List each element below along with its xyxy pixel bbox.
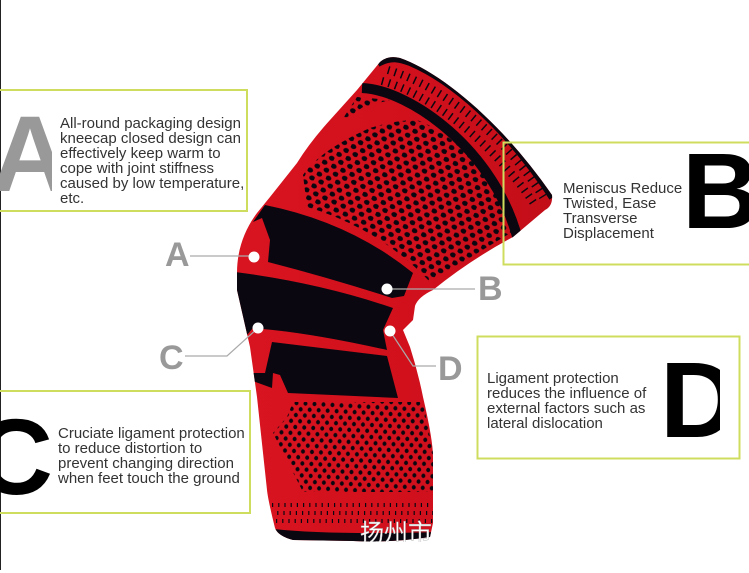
callout B xyxy=(382,270,503,308)
text B: Displacement xyxy=(563,225,655,242)
text A: kneecap closed design can xyxy=(60,130,241,147)
text B xyxy=(563,180,682,242)
black band one xyxy=(253,205,413,298)
bottom rim xyxy=(276,529,431,542)
box A xyxy=(0,90,247,214)
text A: cope with joint stiffness xyxy=(60,160,214,177)
text C: prevent changing direction xyxy=(58,455,234,472)
text D: external factors such as xyxy=(487,400,645,417)
text C: when feet touch the ground xyxy=(57,470,240,487)
text B: Meniscus Reduce xyxy=(563,180,682,197)
text A: All-round packaging design xyxy=(60,115,241,132)
callout D: D xyxy=(438,350,463,388)
upper small mesh xyxy=(344,97,390,118)
callout B: B xyxy=(478,270,503,308)
text B: Twisted, Ease xyxy=(563,195,656,212)
text C: Cruciate ligament protection xyxy=(58,425,245,442)
text D: reduces the influence of xyxy=(487,385,647,402)
sleeve details xyxy=(235,59,552,545)
text C: to reduce distortion to xyxy=(58,440,202,457)
box B xyxy=(504,130,749,264)
letter D: D xyxy=(660,339,738,460)
box C xyxy=(0,391,250,517)
callout A xyxy=(165,236,260,274)
lower dashes xyxy=(272,505,434,521)
text A: caused by low temperature, xyxy=(60,175,244,192)
upper large mesh xyxy=(303,120,512,282)
text B: Transverse xyxy=(563,210,637,227)
black band two xyxy=(235,272,393,350)
callout C xyxy=(159,322,264,377)
knee sleeve illustration xyxy=(235,57,552,547)
box D xyxy=(478,336,740,460)
callout C: C xyxy=(159,339,184,377)
upper black band xyxy=(362,88,518,240)
top rim xyxy=(378,59,552,198)
left edge line xyxy=(0,0,1,570)
black band three xyxy=(250,342,398,398)
lower mesh xyxy=(273,402,434,492)
text A xyxy=(60,115,244,207)
watermark: 扬州市 xyxy=(360,520,432,547)
text D: lateral dislocation xyxy=(487,415,603,432)
text D: Ligament protection xyxy=(487,370,619,387)
text A: etc. xyxy=(60,190,84,207)
text D xyxy=(487,370,647,432)
text C xyxy=(57,425,245,487)
sleeve body xyxy=(237,57,552,541)
callout A: A xyxy=(165,236,190,274)
text A: effectively keep warm to xyxy=(60,145,221,162)
callout D xyxy=(384,326,463,388)
top dashes xyxy=(378,70,543,205)
